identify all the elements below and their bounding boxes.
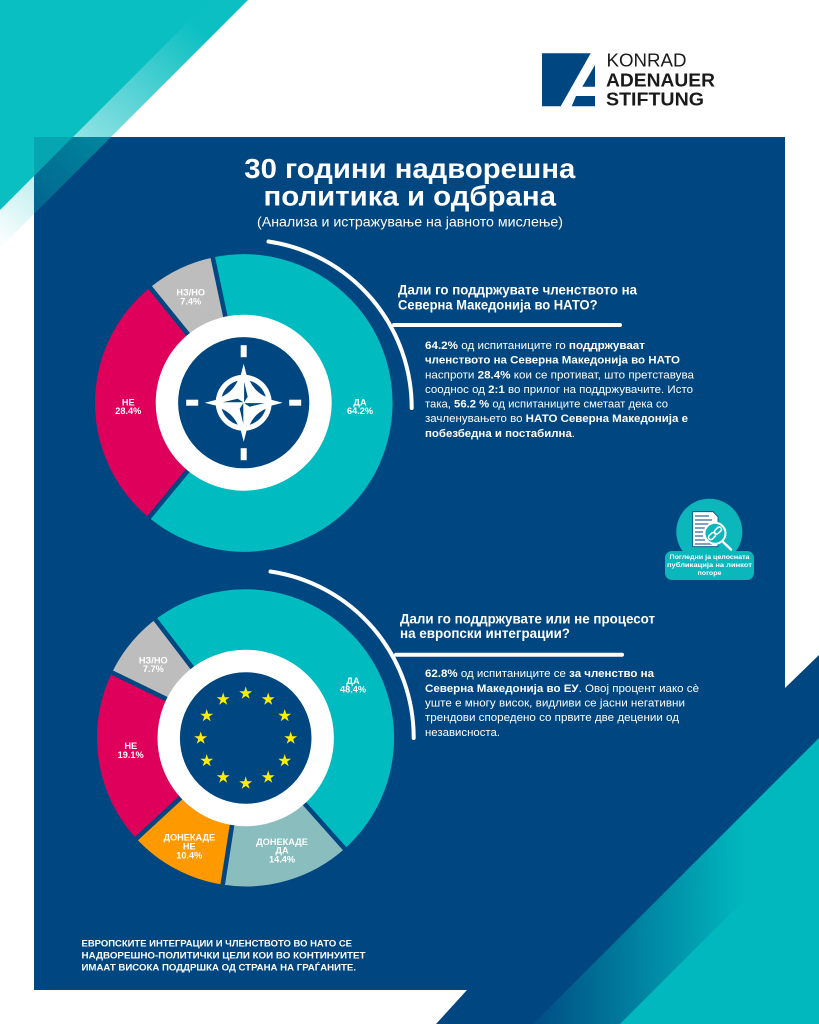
callout text: погоре [698, 571, 722, 577]
arc and rule: NATO [268, 242, 620, 408]
logo wordmark: STIFTUNG [606, 88, 704, 109]
label: НЕ: НЕ [122, 398, 135, 408]
logo mark [542, 53, 595, 106]
segment: НЕ 19.1% [95, 672, 246, 840]
EU question heading: на европски интеграции? [400, 626, 570, 641]
segment: ДОНЕКАДЕ НЕ 10.4% [135, 738, 246, 887]
label: НЗ/НО: 7.4% [180, 296, 201, 306]
segment: ДА 48.4% [154, 587, 396, 850]
logo: Konrad Adenauer Stiftung [542, 50, 715, 109]
title [244, 153, 576, 212]
label: ДА: ДА [346, 676, 360, 686]
EU question heading [400, 611, 655, 641]
footer note: ЕВРОПСКИТЕ ИНТЕГРАЦИИ И ЧЛЕНСТВОТО ВО НАТО СЕ [82, 938, 352, 948]
NATO body text: членството на Северна Македонија во НАТО [425, 355, 680, 367]
NATO body text: соoднос од 2:1 во прилог на поддржувачите. Исто [425, 384, 693, 396]
title: политика и одбрана [264, 181, 557, 212]
white ring with navy centre [167, 326, 320, 480]
label: ДОНЕКАДЕ НЕ: НЕ [183, 841, 196, 851]
segment: НЗ/НО 7.4% [149, 255, 244, 403]
label: ДОНЕКАДЕ ДА: ДА [275, 846, 289, 856]
subtitle: (Анализа и истражување на јавното мислење) [257, 214, 563, 230]
segment: ДА 64.2% [148, 252, 395, 554]
icon: document with magnifier and link [693, 512, 731, 550]
NATO question heading [398, 282, 638, 312]
EU body text: трендови споредено со првите две децении од [425, 712, 680, 724]
logo wordmark [606, 50, 715, 109]
label: ДОНЕКАДЕ НЕ: 10.4% [176, 850, 202, 860]
NATO body text: зачленувањето во НАТО Северна Македонија е [425, 413, 688, 425]
icon: EU stars [194, 686, 297, 789]
icon: NATO compass [186, 345, 301, 460]
label: НЕ: НЕ [124, 741, 137, 751]
EU question heading: Дали го поддржувате или не процесот [400, 611, 655, 626]
logo wordmark: KONRAD [606, 50, 686, 71]
label: НЗ/НО: НЗ/НО [139, 655, 168, 665]
label: ДА: 64.2% [347, 406, 373, 416]
EU body text: 62.8% од испитаниците се за членство на [425, 668, 655, 680]
panel corner overlay triangle [34, 137, 73, 176]
top-left teal gradient triangle [0, 0, 248, 248]
label: ДОНЕКАДЕ НЕ: ДОНЕКАДЕ [163, 833, 215, 843]
logo wordmark: ADENAUER [606, 70, 715, 91]
label: НЗ/НО: 7.7% [143, 664, 164, 674]
footer note: НАДВОРЕШНО-ПОЛИТИЧКИ ЦЕЛИ КОИ ВО КОНТИНУИТЕТ [82, 950, 366, 960]
label: ДОНЕКАДЕ ДА: ДОНЕКАДЕ [256, 837, 308, 847]
NATO body text: така, 56.2 % од испитаниците сметаат дека со [425, 399, 668, 411]
segment: НЕ 28.4% [93, 286, 244, 519]
label: ДА: 48.4% [340, 685, 366, 695]
segment: ДОНЕКАДЕ ДА 14.4% [222, 738, 346, 889]
NATO body text [425, 340, 695, 440]
NATO question heading: Дали го поддржувате членството на [398, 282, 638, 298]
white ring with navy centre [169, 661, 323, 815]
NATO body text: 64.2% од испитаниците го поддржуваат [425, 340, 646, 352]
panel corner overlay band [34, 137, 111, 214]
callout circle [676, 499, 742, 565]
NATO body text: наспроти 28.4% кои се противат, што претставува [425, 369, 695, 381]
NATO body text: побезбедна и постабилна . [425, 428, 575, 440]
label: НЗ/НО: НЗ/НО [176, 288, 205, 298]
EU donut chart [95, 587, 396, 889]
EU body text: уште е многу висок, видливи се јасни негативни [425, 698, 685, 710]
arc and rule: EU [270, 572, 622, 738]
EU body text: Северна Македонија во ЕУ . Овој процент иако сè [425, 683, 699, 695]
NATO question heading: Северна Македонија во НАТО? [398, 298, 598, 312]
footer note: ИМААТ ВИСОКА ПОДДРШКА ОД СТРАНА НА ГРАЃАНИТЕ. [82, 963, 356, 973]
NATO donut chart [93, 252, 395, 554]
footer note [82, 938, 366, 973]
title: 30 години надворешна [244, 153, 576, 184]
callout text [667, 555, 752, 577]
bottom-right gradient triangle [533, 738, 819, 1024]
label: ДА: ДА [353, 398, 367, 408]
callout: link to full publication [665, 499, 754, 580]
top-left solid teal triangle [0, 0, 210, 210]
bottom-right solid teal triangle [620, 825, 819, 1024]
label: НЕ: 28.4% [115, 406, 141, 416]
segment: НЗ/НО 7.7% [110, 618, 246, 738]
EU body text: независноста. [425, 727, 500, 739]
label: ДОНЕКАДЕ ДА: 14.4% [269, 855, 295, 865]
callout label box [665, 551, 754, 580]
label: НЕ: 19.1% [118, 750, 144, 760]
EU body text [425, 668, 699, 739]
callout text: Погледни ја целосната [670, 555, 750, 561]
callout text: публикација на линкот [667, 562, 752, 569]
